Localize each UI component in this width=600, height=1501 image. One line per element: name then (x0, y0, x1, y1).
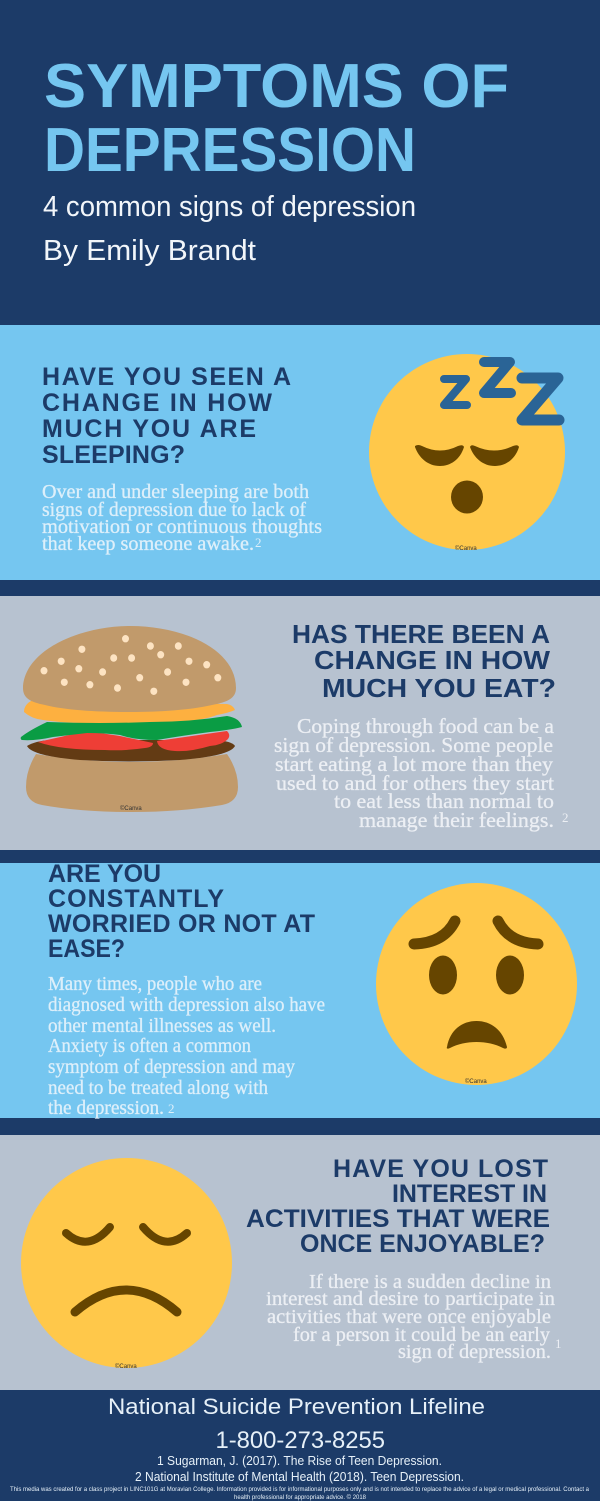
author: By Emily Brandt (43, 235, 256, 267)
text: sleeping: Over and under sleeping are both (42, 481, 309, 503)
icon: worried face: ©Canva (465, 1078, 487, 1085)
heading: lost interest: ACTIVITIES THAT WERE (246, 1205, 550, 1233)
icon: sad face (21, 1158, 232, 1370)
icon: sleeping face (369, 354, 565, 552)
heading: eating (292, 619, 556, 703)
icon: burger (21, 626, 242, 812)
text: sleeping: signs of depression due to lack of (42, 499, 306, 521)
title: DEPRESSION (44, 116, 416, 185)
panel: eating (0, 596, 600, 850)
text: lost interest: 1 (555, 1336, 562, 1351)
text: sleeping: motivation or continuous thoughts (42, 516, 322, 538)
panel: lost interest (0, 1135, 600, 1390)
text: worry: 2 (168, 1101, 174, 1116)
heading: eating: MUCH YOU EAT? (322, 673, 556, 703)
text: lost interest: activities that were once enjoyable (267, 1306, 551, 1328)
heading: sleeping: CHANGE IN HOW (42, 389, 272, 417)
heading: worry: EASE? (48, 935, 125, 963)
text: eating: to eat less than normal to (334, 789, 554, 813)
icon: worried face (376, 883, 577, 1085)
text: worry: symptom of depression and may (48, 1056, 295, 1078)
text: lost interest: interest and desire to participate in (266, 1288, 555, 1310)
icon: burger: ©Canva (120, 805, 142, 812)
disclaimer: health professional for appropriate advice. © 2018 (234, 1494, 367, 1501)
heading: lost interest: INTEREST IN (392, 1180, 547, 1208)
text: worry: other mental illnesses as well. (48, 1015, 276, 1037)
panel: sleeping (0, 325, 600, 580)
text: worry: Many times, people who are (48, 973, 262, 995)
disclaimer (10, 1487, 590, 1501)
heading: worry: WORRIED OR NOT AT (48, 910, 315, 938)
heading: worry: CONSTANTLY (48, 885, 224, 913)
lifeline phone number: 1-800-273-8255 (216, 1427, 385, 1454)
title (44, 52, 509, 185)
panel: header (0, 0, 600, 325)
text: sleeping: 2 (255, 535, 262, 550)
icon: sleeping face: ©Canva (455, 545, 477, 552)
heading: worry: ARE YOU (48, 860, 161, 888)
icon: sad face: ©Canva (115, 1363, 137, 1370)
text: eating (274, 714, 568, 832)
panel: worry (0, 860, 600, 1119)
title: SYMPTOMS OF (44, 52, 509, 121)
panel: footer (0, 1390, 600, 1501)
references (135, 1454, 464, 1484)
text: lost interest: If there is a sudden decline in (309, 1271, 551, 1293)
text: eating: 2 (562, 810, 568, 825)
heading: eating: CHANGE IN HOW (314, 645, 550, 675)
text: lost interest: sign of depression. (398, 1341, 551, 1363)
subtitle: 4 common signs of depression (43, 191, 416, 223)
text: eating: start eating a lot more than they (275, 752, 554, 776)
text: worry: Anxiety is often a common (48, 1035, 251, 1057)
text: lost interest: for a person it could be an early (293, 1324, 550, 1346)
heading: worry (48, 860, 315, 963)
text: eating: Coping through food can be a (297, 714, 555, 738)
references: 1 Sugarman, J. (2017). The Rise of Teen Depression. (157, 1454, 442, 1468)
lifeline name: National Suicide Prevention Lifeline (108, 1394, 485, 1419)
text: lost interest (266, 1271, 562, 1363)
heading: sleeping: HAVE YOU SEEN A (42, 363, 291, 391)
heading: sleeping: SLEEPING? (42, 441, 185, 469)
heading: lost interest: HAVE YOU LOST (333, 1155, 548, 1183)
heading: lost interest: ONCE ENJOYABLE? (300, 1230, 545, 1258)
text: eating: used to and for others they start (276, 771, 554, 795)
text: sleeping: that keep someone awake. (42, 533, 254, 555)
heading: sleeping: MUCH YOU ARE (42, 415, 256, 443)
text: worry (48, 973, 325, 1119)
text: worry: diagnosed with depression also have (48, 994, 325, 1016)
heading: sleeping (42, 363, 291, 469)
text: sleeping (42, 481, 322, 555)
text: eating: manage their feelings. (359, 808, 554, 832)
heading: eating: HAS THERE BEEN A (292, 619, 550, 649)
references: 2 National Institute of Mental Health (2018). Teen Depression. (135, 1470, 464, 1484)
text: worry: the depression. (48, 1097, 164, 1119)
heading: lost interest (246, 1155, 550, 1258)
disclaimer: This media was created for a class project in LINC101G at Moravian College. Information provided is for informational purposes only and is not intended to replace the advice of a legal or medical professional. Contact a (10, 1487, 590, 1493)
text: eating: sign of depression. Some people (274, 733, 553, 757)
text: worry: need to be treated along with (48, 1077, 268, 1099)
